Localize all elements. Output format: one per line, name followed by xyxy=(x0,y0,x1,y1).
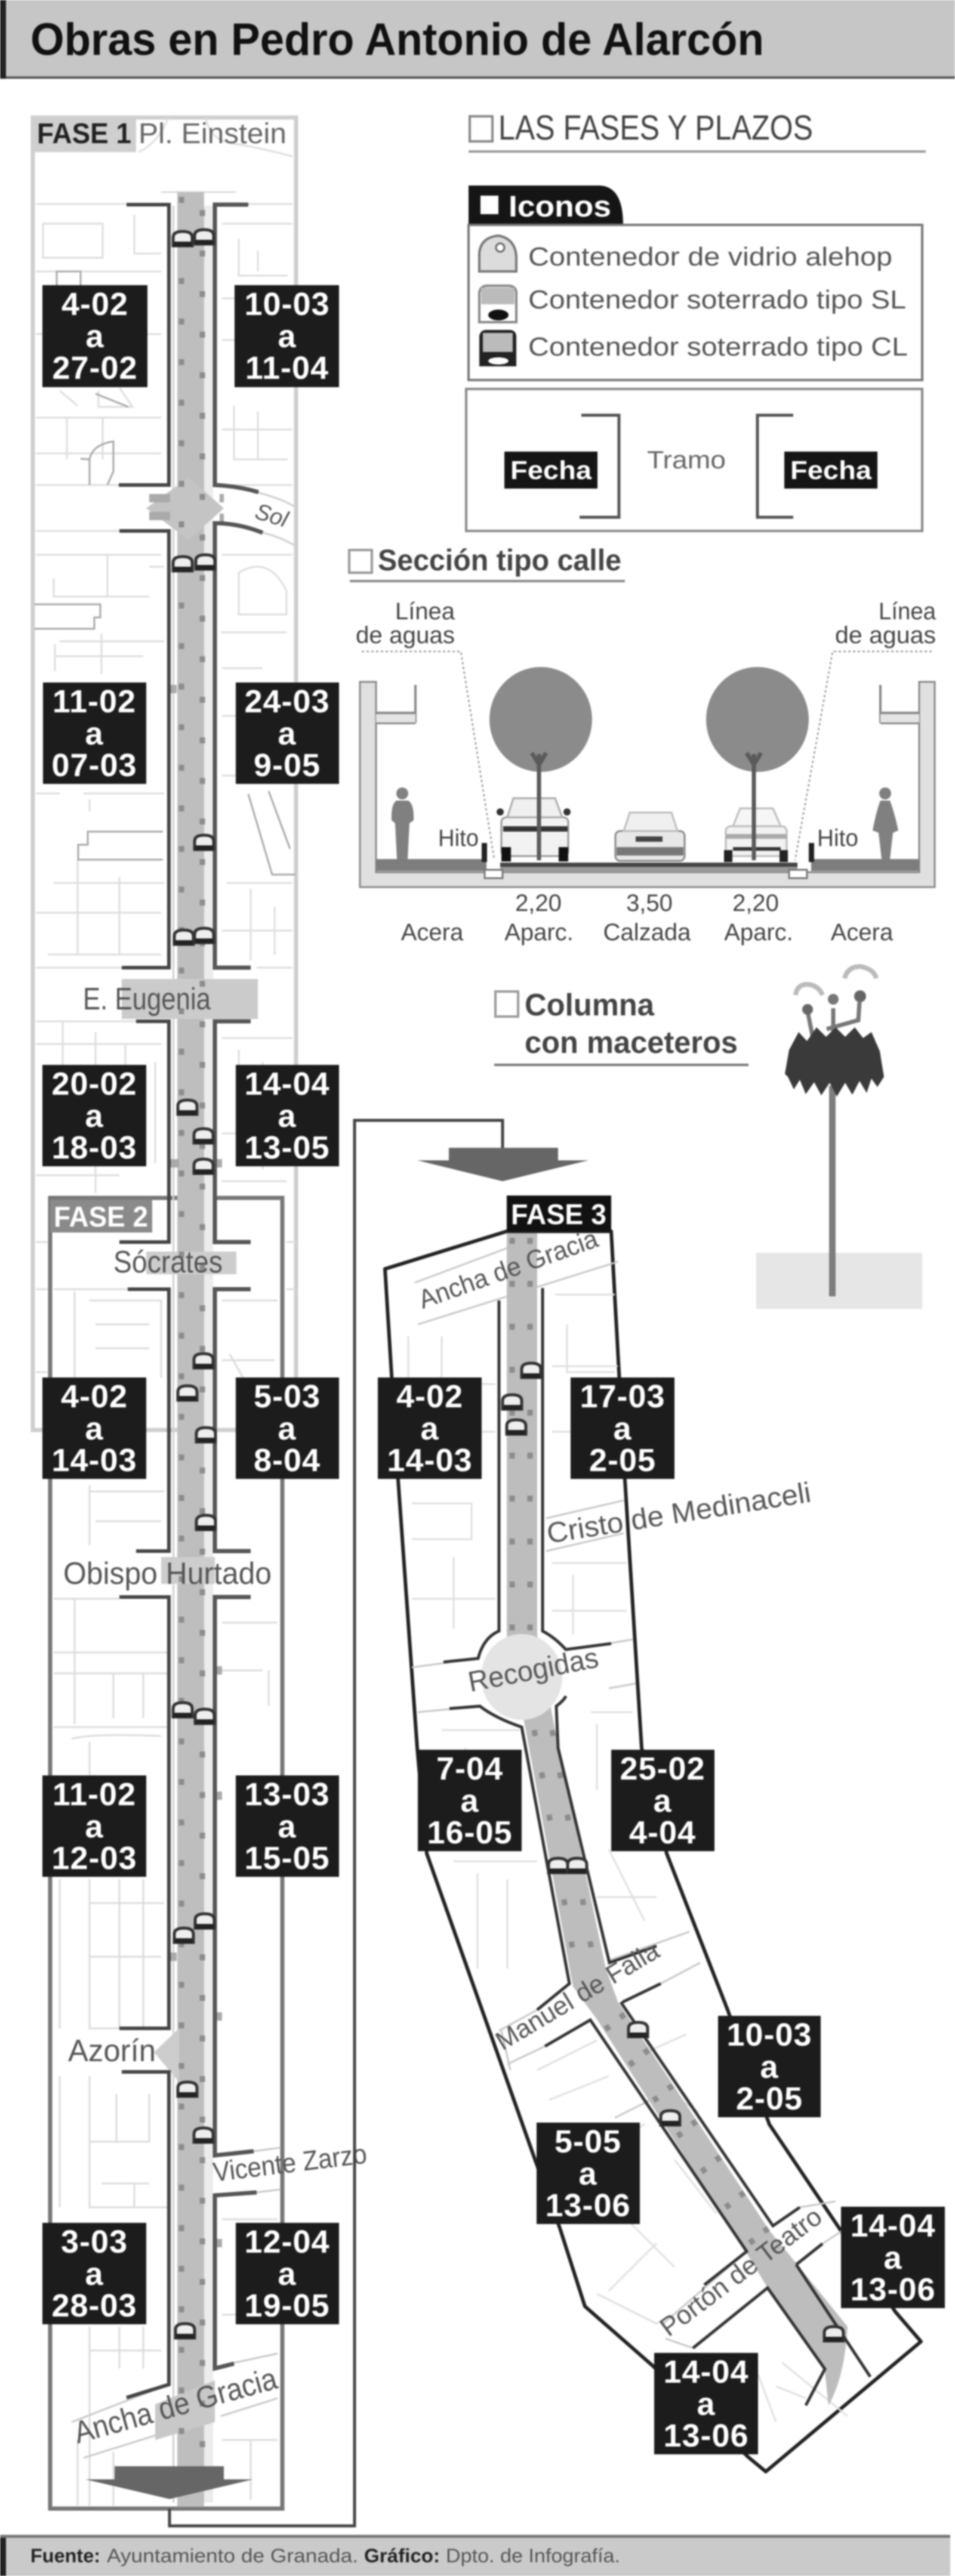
container icons xyxy=(173,230,215,2339)
date box: 14-04 xyxy=(663,2354,749,2390)
heading: las fases y plazos xyxy=(469,109,926,153)
fecha left xyxy=(504,452,597,489)
road dots fase 3 xyxy=(512,1238,779,2255)
tree trunks in front of cars xyxy=(532,753,761,860)
date box: 27-02 xyxy=(52,350,138,386)
street name: Sócrates: Sócrates xyxy=(113,1245,223,1280)
footer band: Ayuntamiento de Granada. xyxy=(107,2545,358,2566)
street name: Vicente Zarzo: Vicente Zarzo xyxy=(211,2138,368,2188)
date box: 4-02 xyxy=(61,1379,128,1414)
tree crown left xyxy=(489,667,592,772)
date box: 7-04 xyxy=(436,1751,503,1787)
date box: 17-03 xyxy=(580,1379,666,1414)
date box: 12-03 xyxy=(51,1840,137,1876)
container icons fase 3 xyxy=(503,1363,843,2342)
date box: 19-05 xyxy=(244,2288,330,2324)
fecha right: Fecha xyxy=(790,456,872,485)
street name: Ancha de Gracia: Ancha de Gracia xyxy=(70,2361,281,2451)
street name: Ancha de Gracia fase 3: Ancha de Gracia xyxy=(415,1224,602,1314)
footer band: Dpto. de Infografía. xyxy=(446,2545,620,2566)
date box: 13-06 xyxy=(663,2418,749,2454)
date box xyxy=(42,1065,146,1166)
date box: a xyxy=(883,2240,902,2276)
date box: 4-02 xyxy=(396,1379,463,1414)
measures row: Acera xyxy=(401,919,464,946)
date box: a xyxy=(85,2256,104,2292)
person left xyxy=(392,787,414,859)
date box: 11-02 xyxy=(53,684,136,719)
map blocks fase 1 xyxy=(36,118,295,1372)
date box: 14-03 xyxy=(387,1443,473,1478)
date box: a xyxy=(653,1783,672,1819)
left road edges xyxy=(119,205,169,2398)
panel: iconos legend xyxy=(469,186,922,380)
date box: 20-02 xyxy=(51,1066,137,1102)
date box: 9-05 xyxy=(254,748,321,783)
street name: E. Eugenia: E. Eugenia xyxy=(83,982,211,1017)
date box: a xyxy=(613,1411,632,1447)
measures row: Aparc. xyxy=(724,919,793,946)
date box: 24-03 xyxy=(244,684,330,719)
road: main street fases 1 and 2 xyxy=(119,192,263,2507)
date box: 2-05 xyxy=(589,1443,656,1478)
intersection: Eugenia xyxy=(122,979,258,1019)
date box xyxy=(236,2223,339,2324)
measures row xyxy=(401,890,894,946)
date box: 14-04 xyxy=(244,1066,330,1102)
footer band xyxy=(0,2535,950,2576)
intersection: Sol xyxy=(146,477,224,540)
date box: a xyxy=(278,319,297,354)
measures row: 3,50 xyxy=(626,890,673,916)
date box: 13-06 xyxy=(545,2188,631,2223)
date box xyxy=(42,1377,146,1479)
date box: 13-05 xyxy=(244,1130,330,1166)
date box: a xyxy=(85,1411,104,1447)
street markers xyxy=(181,197,202,2506)
arrow: start of fase 3 xyxy=(417,1148,589,1181)
intersection: Ancha de Gracia xyxy=(155,2380,215,2440)
arrow: end of fase 2 xyxy=(85,2466,253,2499)
date box: a xyxy=(85,1098,104,1134)
date box xyxy=(235,285,339,387)
measures row: Calzada xyxy=(603,919,691,946)
date box: 2-05 xyxy=(736,2081,803,2117)
car center xyxy=(615,813,685,861)
date box: 5-05 xyxy=(554,2124,621,2160)
date box: a xyxy=(278,1809,297,1845)
label: Pl. Einstein: Pl. Einstein xyxy=(138,118,286,150)
date box: a xyxy=(278,1411,297,1447)
street name: Portón de Teatro: Portón de Teatro xyxy=(655,2202,827,2342)
date box: a xyxy=(760,2049,779,2085)
label: fase 3: FASE 3 xyxy=(511,1199,606,1231)
date box: 11-04 xyxy=(245,350,329,386)
date box xyxy=(42,1775,146,1877)
text: contenedor tipo CL: Contenedor soterrado tipo CL xyxy=(528,332,908,362)
side street bands xyxy=(412,1248,842,2348)
measures row: 2,20 xyxy=(515,890,562,916)
source text: Fuente: xyxy=(30,2545,100,2566)
tramo: Tramo xyxy=(647,446,726,474)
panel: fecha tramo legend xyxy=(466,389,922,531)
map blocks fase 3 xyxy=(408,1295,848,2422)
road fill fase 3 xyxy=(507,1233,848,2405)
label: hito izquierda: Hito xyxy=(438,825,479,851)
date box xyxy=(841,2207,945,2308)
date box: 25-02 xyxy=(620,1751,706,1787)
fecha left: Fecha xyxy=(510,456,592,485)
date box xyxy=(571,1377,674,1479)
date box: 11-02 xyxy=(53,1777,136,1812)
measures row: Acera xyxy=(831,919,894,946)
date box: a xyxy=(697,2386,716,2422)
connector line between fases xyxy=(170,1120,503,2526)
date box xyxy=(42,285,147,387)
date box: 18-03 xyxy=(51,1130,137,1166)
date box: 13-03 xyxy=(244,1777,330,1812)
date box xyxy=(654,2353,758,2454)
label: fase 1: FASE 1 xyxy=(37,118,131,150)
date box xyxy=(42,2223,146,2324)
person right xyxy=(873,787,898,859)
heading: columna con maceteros: Columna xyxy=(525,988,655,1023)
street name: Obispo Hurtado: Obispo Hurtado xyxy=(63,1556,272,1591)
illustration: column with planters xyxy=(756,966,922,1309)
date box: 14-03 xyxy=(51,1443,137,1478)
tree crown right xyxy=(706,667,809,772)
car left xyxy=(497,798,571,861)
date box: 14-04 xyxy=(850,2208,936,2244)
date box: 10-03 xyxy=(244,286,330,322)
street bands fase 2 xyxy=(72,2148,281,2458)
intersection: Sócrates xyxy=(146,1252,236,1274)
street name: Manuel de Falla: Manuel de Falla xyxy=(491,1936,664,2056)
date box xyxy=(611,1750,714,1851)
header band xyxy=(0,0,955,79)
date box xyxy=(537,2123,640,2224)
title: Obras en Pedro Antonio de Alarcón xyxy=(30,14,764,65)
label: hito derecha: Hito xyxy=(817,825,858,851)
date box: 3-03 xyxy=(61,2224,128,2260)
heading: columna con maceteros: con maceteros xyxy=(525,1026,738,1060)
building walls and ground xyxy=(360,682,935,887)
date box: 8-04 xyxy=(254,1443,321,1478)
icon: contenedor tipo CL xyxy=(479,330,516,366)
street name: Azorín: Azorín xyxy=(68,2034,156,2068)
map blocks fase 2 xyxy=(54,1289,278,2506)
measures row: Aparc. xyxy=(504,919,574,946)
date box xyxy=(43,682,146,784)
intersection: Azorín xyxy=(154,2028,179,2082)
date box: a xyxy=(85,1809,104,1845)
footer band: Gráfico: xyxy=(364,2545,440,2566)
heading: columna con maceteros xyxy=(494,988,748,1066)
panel: fase 2 map xyxy=(50,1198,282,2509)
panel: iconos legend: Iconos xyxy=(509,190,611,223)
darker block outlines fase 1 xyxy=(35,271,295,875)
label: fase 1 xyxy=(33,118,286,152)
date box: 15-05 xyxy=(244,1840,330,1876)
panel: fase 1 map xyxy=(33,118,296,1430)
street name: Cristo de Medinaceli: Cristo de Medinaceli xyxy=(544,1477,813,1550)
car right xyxy=(724,808,788,862)
roundabout xyxy=(481,1634,562,1720)
date box: 16-05 xyxy=(427,1815,513,1851)
date box: a xyxy=(85,716,104,752)
date box xyxy=(236,1377,339,1479)
date box: a xyxy=(578,2156,597,2192)
road edges fase 3 xyxy=(443,1288,870,2405)
date box: a xyxy=(460,1783,479,1819)
panel: fase 3 map xyxy=(385,1231,921,2472)
date box: 5-03 xyxy=(254,1379,321,1414)
date box: a xyxy=(85,319,104,354)
label: línea de aguas izquierda: Línea xyxy=(395,598,455,625)
label: de aguas derecha: de aguas xyxy=(835,622,936,648)
chart: street cross section xyxy=(360,651,935,887)
intersection: Obispo Hurtado xyxy=(161,1557,215,1584)
dotted callout lines xyxy=(362,651,932,860)
date box: a xyxy=(278,2256,297,2292)
pavement bands xyxy=(376,859,919,871)
date box xyxy=(418,1750,522,1851)
date box xyxy=(236,1775,339,1877)
date box xyxy=(236,1065,339,1166)
icon: contenedor tipo SL xyxy=(479,286,516,322)
date box: 07-03 xyxy=(51,748,137,783)
date box xyxy=(718,2016,821,2117)
heading: las fases y plazos: LAS FASES Y PLAZOS xyxy=(498,109,813,147)
street name: Sol: Sol xyxy=(252,499,292,533)
label: fase 2: FASE 2 xyxy=(54,1201,148,1233)
measures row: 2,20 xyxy=(732,890,779,916)
date box: a xyxy=(278,1098,297,1134)
date box xyxy=(378,1377,482,1479)
date box: 12-04 xyxy=(244,2224,330,2260)
bollards xyxy=(482,843,487,862)
date box xyxy=(236,682,339,784)
date box: 10-03 xyxy=(726,2017,812,2053)
sol street edges xyxy=(257,492,295,546)
date box: 4-04 xyxy=(629,1815,696,1851)
date box: a xyxy=(420,1411,439,1447)
fecha right xyxy=(784,452,877,489)
street name: Recogidas: Recogidas xyxy=(466,1642,601,1698)
date box: a xyxy=(278,716,297,752)
date box: 13-06 xyxy=(850,2272,936,2308)
heading: sección tipo calle: Sección tipo calle xyxy=(378,543,621,577)
text: contenedor de vidrio: Contenedor de vidrio alehop xyxy=(528,242,892,271)
label: de aguas izquierda: de aguas xyxy=(356,622,455,648)
label: línea de aguas derecha: Línea xyxy=(879,598,936,625)
icon: contenedor de vidrio xyxy=(479,236,516,271)
date box: 28-03 xyxy=(51,2288,137,2324)
date box: 4-02 xyxy=(61,286,128,322)
right road edges xyxy=(215,205,263,2368)
text: contenedor tipo SL: Contenedor soterrado tipo SL xyxy=(528,285,906,314)
